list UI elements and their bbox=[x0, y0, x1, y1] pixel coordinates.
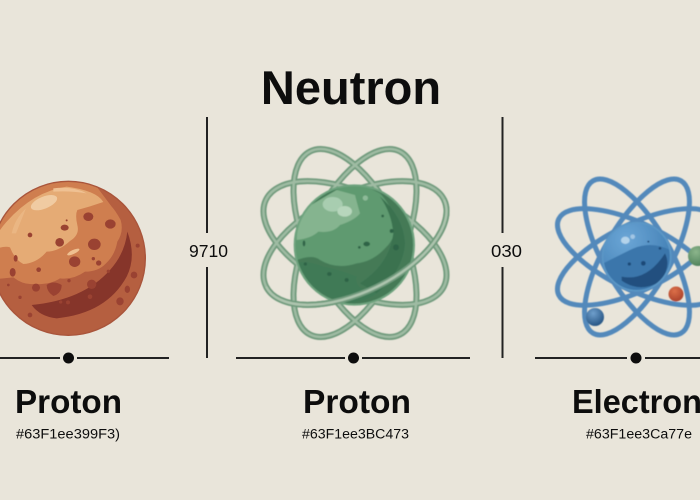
green front ring bbox=[266, 200, 465, 330]
blue orbit rings bbox=[544, 164, 700, 350]
divider: left vertical line with value: 9710 bbox=[189, 241, 228, 261]
craters bbox=[7, 212, 140, 317]
electron: green bbox=[688, 246, 700, 266]
divider: right vertical line with value: 030 bbox=[491, 241, 522, 261]
green orbit rings bbox=[245, 131, 465, 355]
icon: green atom bbox=[260, 145, 450, 341]
icon: red proton sphere bbox=[0, 177, 146, 336]
icon: blue atom bbox=[554, 176, 700, 338]
timeline marker: center bbox=[236, 352, 470, 364]
electron: blue bbox=[586, 308, 604, 326]
timeline marker: right bbox=[535, 352, 700, 364]
green sphere bbox=[293, 180, 414, 305]
code: center proton: #63F1ee3BC473 bbox=[302, 426, 409, 442]
blue sphere bbox=[602, 222, 671, 293]
electron: red bbox=[668, 286, 684, 302]
timeline marker: left bbox=[0, 352, 169, 364]
label: left proton: Proton bbox=[15, 383, 122, 420]
label: center proton: Proton bbox=[303, 383, 411, 420]
code: left proton: #63F1ee399F3) bbox=[16, 426, 120, 442]
code: electron: #63F1ee3Ca77e bbox=[586, 426, 692, 442]
title: Neutron bbox=[261, 61, 441, 114]
